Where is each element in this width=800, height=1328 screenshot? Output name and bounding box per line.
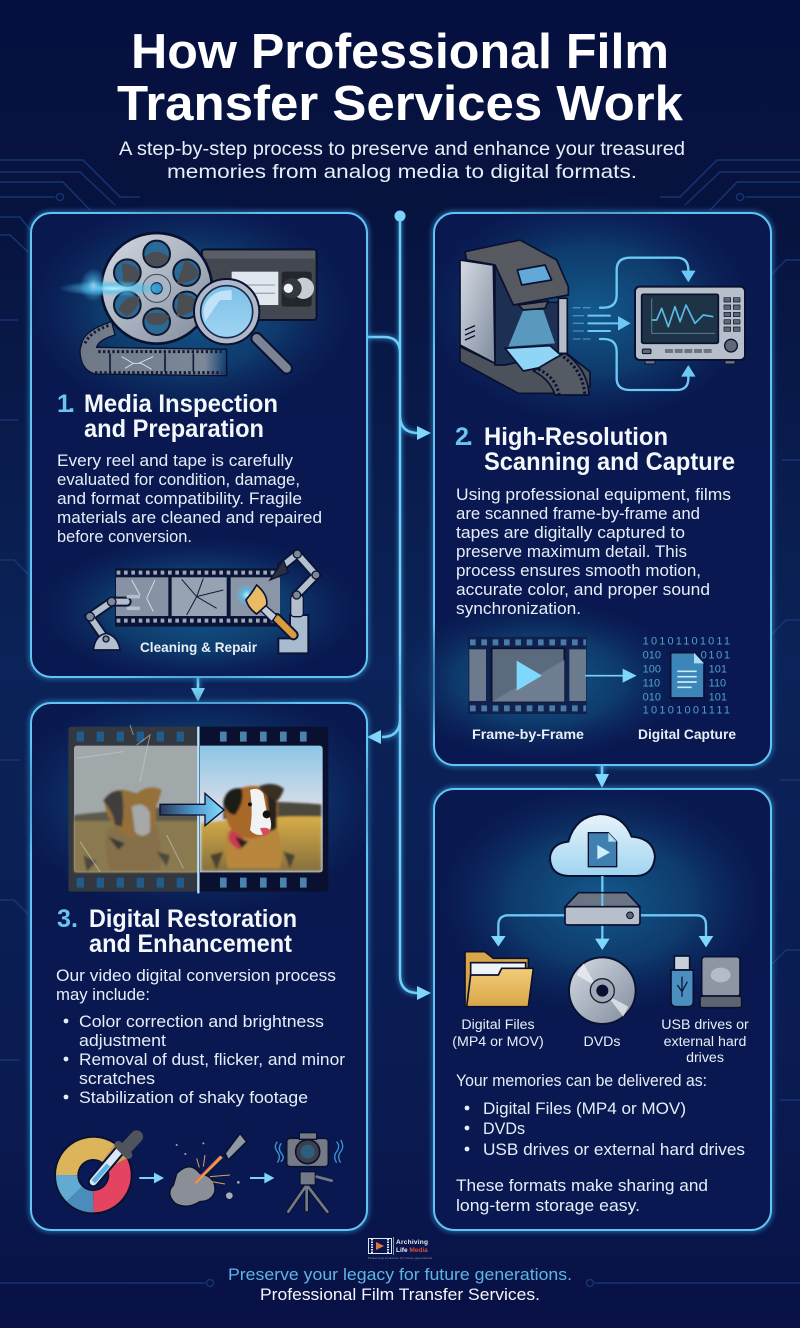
comparison arrow — [160, 793, 224, 826]
body text: preserve maximum detail. This — [456, 542, 687, 561]
step number and heading: High-Resolution — [484, 423, 668, 451]
body text with bullets: These formats make sharing and — [456, 1176, 708, 1195]
body text with bullets: Color correction and brightness — [79, 1012, 324, 1031]
format labels — [452, 1017, 749, 1066]
body text with bullets: DVDs — [483, 1119, 525, 1138]
head — [465, 240, 568, 305]
footer logo: Life Media — [396, 1247, 428, 1254]
body text: tapes are digitally captured to — [456, 523, 685, 542]
dust particle and laser — [170, 1133, 247, 1206]
footer tagline: Preserve your legacy for future generations. — [228, 1265, 572, 1284]
binary digits: 10101001111 — [643, 705, 730, 717]
step number and heading — [57, 390, 278, 443]
connector arrows — [491, 876, 713, 950]
connector: central flow line with branch arrows — [191, 210, 609, 1000]
lamp — [518, 301, 548, 310]
data arrows — [573, 258, 695, 390]
body text: and format compatibility. Fragile — [57, 489, 302, 508]
binary digits: 101 — [709, 691, 727, 703]
light cone — [508, 310, 555, 347]
arrow — [139, 1175, 155, 1181]
body text: synchronization. — [456, 599, 581, 618]
right robot arm — [270, 550, 320, 653]
binary digits: 110 — [643, 677, 660, 689]
arrow — [250, 1175, 265, 1181]
image: before and after dog photo on film strip — [68, 725, 328, 893]
arrow head — [623, 669, 637, 683]
body text — [57, 451, 322, 546]
footer logo — [368, 1237, 433, 1260]
icon: film scanner and waveform monitor — [460, 240, 745, 395]
head screen — [517, 265, 552, 285]
format labels: (MP4 or MOV) — [452, 1034, 544, 1050]
captions: Frame-by-Frame — [472, 726, 584, 742]
icon: cloud, drive and delivery options — [465, 814, 742, 1024]
step number and heading: 3. — [57, 905, 78, 933]
magnifier — [194, 279, 287, 368]
panel 1: media inspection and preparation — [25, 200, 367, 685]
binary digits: 010 — [643, 691, 661, 703]
footer tagline — [228, 1265, 572, 1304]
binary digits: 010 — [643, 649, 661, 661]
icon: film reel, VHS tape and magnifier — [58, 233, 317, 376]
body text: accurate color, and proper sound — [456, 580, 710, 599]
step number and heading: 1. — [57, 390, 75, 418]
body text with bullets: may include: — [56, 985, 150, 1004]
body text: evaluated for condition, damage, — [57, 470, 300, 489]
left body — [460, 260, 495, 363]
body text with bullets: scratches — [79, 1069, 155, 1088]
step number and heading: 2. — [455, 423, 473, 451]
scanner base — [460, 347, 590, 393]
before side — [68, 725, 198, 892]
binary digits: 101 — [709, 663, 727, 675]
right column — [558, 298, 567, 353]
body text with bullets: Stabilization of shaky footage — [79, 1088, 308, 1107]
arrow — [585, 673, 627, 678]
arrow head — [154, 1173, 164, 1183]
binary digits: 110 — [709, 677, 726, 689]
binary digits: 0101 — [701, 649, 730, 661]
captions: Digital Capture — [638, 726, 736, 742]
body text with bullets: Digital Files (MP4 or MOV) — [483, 1099, 686, 1118]
VHS tape — [202, 249, 317, 320]
color wheel with dropper — [55, 1137, 137, 1213]
body text: before conversion. — [57, 527, 192, 546]
binary digits — [643, 636, 730, 717]
waveform monitor — [635, 287, 745, 364]
body text with bullets: Your memories can be delivered as: — [456, 1071, 707, 1090]
scanner bed — [505, 346, 568, 371]
scanner — [460, 240, 590, 395]
step number and heading: Media Inspection — [84, 390, 278, 418]
film frame with play button — [468, 637, 587, 714]
USB drive — [671, 956, 693, 1007]
icon: cleaning and repair film strip with robot arms — [86, 550, 320, 653]
body text with bullets: adjustment — [79, 1031, 166, 1050]
film — [533, 353, 589, 395]
footer logo: Archiving — [396, 1239, 428, 1246]
body text with bullets: long-term storage easy. — [456, 1196, 640, 1215]
divider line — [195, 727, 202, 893]
body text with bullets — [56, 966, 345, 1107]
arrow head — [264, 1173, 274, 1183]
title: Transfer Services Work — [117, 77, 684, 131]
body text: process ensures smooth motion, — [456, 561, 701, 580]
film reel — [101, 233, 212, 344]
panel 4: delivery formats — [434, 785, 771, 1230]
body text: Every reel and tape is carefully — [57, 451, 294, 470]
body text: are scanned frame-by-frame and — [456, 504, 700, 523]
DVD disc — [569, 957, 636, 1024]
step number and heading: and Enhancement — [89, 930, 293, 958]
binary digits: 10101101011 — [643, 636, 730, 648]
icon: frame-by-frame film to digital capture — [468, 636, 730, 717]
title: How Professional Film — [131, 25, 669, 79]
caption: cleaning and repair: Cleaning & Repair — [140, 639, 258, 655]
subtitle — [119, 138, 685, 183]
film strip — [80, 322, 227, 376]
scanner interior — [495, 265, 558, 365]
step number and heading: and Preparation — [84, 415, 264, 443]
body text — [456, 485, 731, 618]
brush — [246, 585, 293, 635]
format labels: external hard — [664, 1034, 746, 1050]
camera on tripod — [275, 1133, 343, 1212]
footer logo: Preserving memories for future generations — [368, 1257, 433, 1260]
format labels: drives — [686, 1050, 724, 1066]
step number and heading — [57, 905, 297, 958]
body text: materials are cleaned and repaired — [57, 508, 322, 527]
format labels: Digital Files — [461, 1017, 535, 1033]
document icon — [671, 653, 704, 698]
left robot arm — [86, 597, 138, 650]
title — [117, 25, 684, 131]
panel 2: high-resolution scanning and capture — [390, 195, 771, 765]
body text with bullets: USB drives or external hard drives — [483, 1140, 745, 1159]
captions — [472, 726, 736, 742]
body text with bullets: Removal of dust, flicker, and minor — [79, 1050, 345, 1069]
external hard drive — [700, 957, 742, 1008]
icons: color wheel, dust removal, stabilization — [55, 1133, 343, 1213]
folder — [465, 952, 533, 1007]
subtitle: memories from analog media to digital formats. — [167, 161, 637, 183]
after side — [198, 727, 328, 892]
subtitle: A step-by-step process to preserve and enhance your treasured — [119, 138, 685, 160]
body text with bullets — [456, 1071, 745, 1215]
format labels: USB drives or — [661, 1017, 749, 1033]
panel 3: digital restoration and enhancement — [8, 685, 388, 1230]
step number and heading — [455, 423, 735, 476]
cloud with video file — [550, 814, 655, 876]
step number and heading: Digital Restoration — [89, 905, 297, 933]
body text: Using professional equipment, films — [456, 485, 731, 504]
damaged film strip — [115, 568, 280, 627]
light beam — [58, 268, 168, 302]
binary digits: 100 — [643, 663, 661, 675]
format labels: DVDs — [583, 1034, 621, 1050]
footer tagline: Professional Film Transfer Services. — [260, 1285, 540, 1304]
hard drive unit — [565, 893, 640, 925]
body text with bullets: Our video digital conversion process — [56, 966, 336, 985]
step number and heading: Scanning and Capture — [484, 448, 735, 476]
